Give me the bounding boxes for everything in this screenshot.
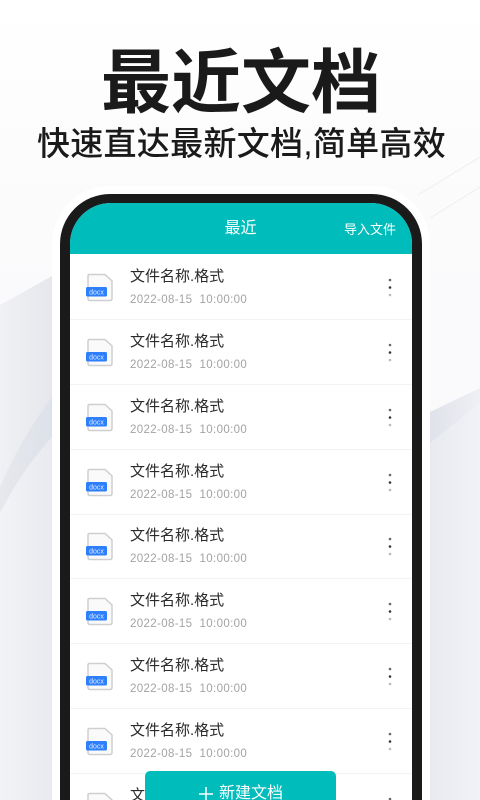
icon: docx file: docx <box>89 289 104 296</box>
header title: 最近 <box>224 220 256 237</box>
file row 1 <box>70 255 412 320</box>
phone frame <box>60 194 422 800</box>
plus icon <box>199 787 213 800</box>
title: 最近文档 <box>101 44 381 122</box>
phone halo <box>52 186 430 800</box>
icon: docx file: docx <box>89 548 104 555</box>
icon: more menu <box>388 538 392 556</box>
file name: 文件名称.格式 <box>130 333 224 350</box>
file name: 文件名称.格式 <box>130 657 224 674</box>
icon: more menu <box>388 668 392 686</box>
icon: docx file: docx <box>89 743 104 750</box>
file name: 文件名称.格式 <box>130 592 224 609</box>
file name: 文件名称.格式 <box>130 463 224 480</box>
file row 2 <box>70 320 412 385</box>
icon: docx file: docx <box>89 484 104 491</box>
icon: docx file: docx <box>89 613 104 620</box>
file name: 文件名称.格式 <box>130 527 224 544</box>
subtitle: 快速直达最新文档,简单高效 <box>37 125 446 162</box>
file date: 2022-08-15 10:00:00 <box>130 748 247 760</box>
file row 8 <box>70 709 412 774</box>
file row 5 <box>70 514 412 579</box>
icon: more menu <box>388 602 392 620</box>
file row 9 <box>70 774 412 800</box>
import button: 导入文件 <box>344 222 396 237</box>
file date: 2022-08-15 10:00:00 <box>130 359 247 371</box>
phone screen <box>70 203 412 800</box>
file date: 2022-08-15 10:00:00 <box>130 424 247 436</box>
file row 4 <box>70 450 412 515</box>
icon: docx file: docx <box>89 419 104 426</box>
file date: 2022-08-15 10:00:00 <box>130 294 247 306</box>
file date: 2022-08-15 10:00:00 <box>130 553 247 565</box>
icon: more menu <box>388 344 392 362</box>
icon: docx file <box>86 532 113 560</box>
icon: docx file <box>87 792 113 800</box>
app header <box>70 203 412 254</box>
icon: docx file <box>86 598 113 626</box>
icon: docx file: docx <box>89 354 104 361</box>
icon: more menu <box>388 408 392 426</box>
icon: more menu <box>388 798 392 800</box>
file name: 文件名称.格式 <box>130 722 224 739</box>
file row 6 <box>70 579 412 644</box>
new document button <box>145 771 336 800</box>
icon: more menu <box>388 732 392 750</box>
file date: 2022-08-15 10:00:00 <box>130 683 247 695</box>
icon: docx file <box>86 338 113 366</box>
file row 3 <box>70 385 412 450</box>
icon: more menu <box>388 474 392 492</box>
icon: docx file <box>86 662 113 690</box>
icon: docx file <box>86 468 113 496</box>
file date: 2022-08-15 10:00:00 <box>130 618 247 630</box>
icon: docx file <box>86 274 113 302</box>
icon: docx file: docx <box>89 678 104 685</box>
file row 7 <box>70 644 412 709</box>
icon: more menu <box>388 278 392 296</box>
icon: docx file <box>86 728 113 756</box>
file name: 文件名称.格式 <box>130 398 224 415</box>
file date: 2022-08-15 10:00:00 <box>130 489 247 501</box>
file name: 文件名称.格式 <box>130 268 224 285</box>
icon: docx file <box>86 404 113 432</box>
